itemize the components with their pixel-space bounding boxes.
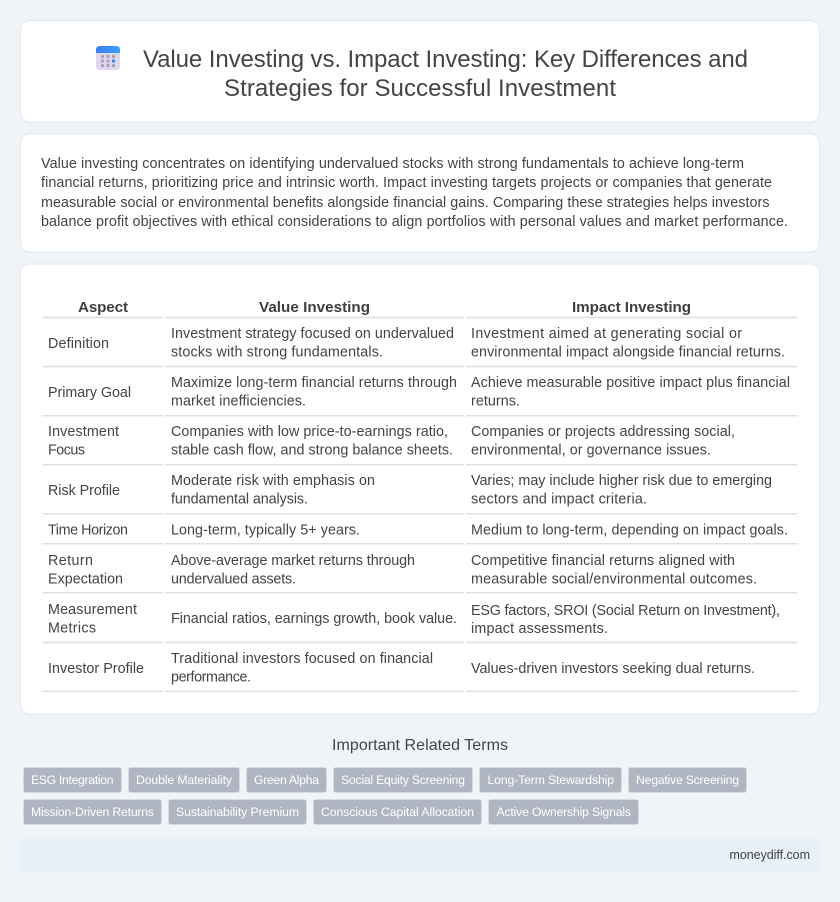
- tag: ESG Integration: ESG Integration: [31, 773, 114, 787]
- table header: Value Investing: [259, 299, 370, 316]
- row: definition: Investment strategy focused on undervalued: [171, 326, 454, 342]
- row: risk profile: sectors and impact criteria.: [471, 492, 647, 508]
- title: Strategies for Successful Investment: [224, 75, 616, 102]
- text block: introduction: measurable social or environmental benefits alongside financial gains. Comparing these strategies helps investors: [41, 195, 770, 211]
- footer: [20, 838, 820, 872]
- tag: ESG Integration: [24, 768, 122, 792]
- row: primary goal: Achieve measurable positive impact plus financial: [471, 375, 790, 391]
- row: return expectation: Expectation: [48, 572, 123, 588]
- title: [143, 46, 748, 102]
- text block: introduction: [41, 156, 788, 230]
- row: time horizon: [43, 522, 797, 544]
- row: risk profile: Risk Profile: [48, 483, 120, 499]
- text block: introduction: financial returns, prioritizing price and intrinsic worth. Impact investing targets projects or companies that generate: [41, 175, 772, 191]
- tag: Green Alpha: Green Alpha: [254, 773, 319, 787]
- row: definition: stocks with strong fundamentals.: [171, 344, 383, 360]
- row: primary goal: [43, 375, 797, 416]
- tag: Mission-Driven Returns: Mission-Driven Returns: [31, 805, 154, 819]
- panel: introduction: [20, 134, 820, 252]
- row: measurement metrics: Metrics: [48, 620, 96, 636]
- row: return expectation: Return: [48, 553, 93, 569]
- tag: Sustainability Premium: [168, 800, 306, 824]
- tag: Conscious Capital Allocation: Conscious Capital Allocation: [321, 805, 474, 819]
- row: measurement metrics: impact assessments.: [471, 621, 608, 637]
- icon: calendar: [96, 46, 120, 70]
- row: primary goal: market inefficiencies.: [171, 394, 306, 410]
- row: primary goal: Maximize long-term financial returns through: [171, 375, 457, 391]
- heading: related terms: Important Related Terms: [332, 737, 508, 754]
- row: investment focus: stable cash flow, and strong balance sheets.: [171, 442, 453, 458]
- row: primary goal: Primary Goal: [48, 385, 131, 401]
- tag: Active Ownership Signals: [488, 800, 638, 824]
- related terms tags: [24, 768, 746, 824]
- row: measurement metrics: Measurement: [48, 602, 137, 618]
- row: investment focus: Companies with low price-to-earnings ratio,: [171, 424, 448, 440]
- row: measurement metrics: [43, 602, 797, 642]
- tag: Social Equity Screening: [334, 768, 472, 792]
- row: return expectation: measurable social/environmental outcomes.: [471, 572, 757, 588]
- tag: Sustainability Premium: Sustainability Premium: [176, 805, 299, 819]
- row: investor profile: Values-driven investors seeking dual returns.: [471, 661, 755, 677]
- row: time horizon: Time Horizon: [48, 522, 128, 538]
- row: risk profile: Moderate risk with emphasis on: [171, 473, 375, 489]
- table header: [43, 299, 797, 318]
- row: risk profile: Varies; may include higher risk due to emerging: [471, 473, 772, 489]
- row: return expectation: undervalued assets.: [171, 572, 296, 588]
- row: investment focus: environmental, or governance issues.: [471, 442, 711, 458]
- tag: Double Materiality: Double Materiality: [136, 773, 233, 787]
- row: investor profile: [43, 651, 797, 691]
- table header: Impact Investing: [572, 299, 691, 316]
- panel: title card: [20, 20, 820, 122]
- tag: Double Materiality: [128, 768, 240, 792]
- row: investment focus: Investment: [48, 424, 119, 440]
- row: investor profile: Traditional investors focused on financial: [171, 651, 433, 667]
- row: time horizon: Medium to long-term, depending on impact goals.: [471, 522, 788, 538]
- row: investor profile: performance.: [171, 670, 251, 686]
- row: investor profile: Investor Profile: [48, 661, 144, 677]
- tag: Active Ownership Signals: Active Ownership Signals: [496, 805, 631, 819]
- title: Value Investing vs. Impact Investing: Key Differences and: [143, 46, 748, 73]
- tag: Green Alpha: [246, 768, 326, 792]
- row: definition: Investment aimed at generating social or: [471, 326, 742, 342]
- tag: Mission-Driven Returns: [24, 800, 162, 824]
- row: definition: [43, 326, 797, 366]
- tag: Negative Screening: [628, 768, 746, 792]
- row: return expectation: [43, 553, 797, 593]
- row: investment focus: Focus: [48, 442, 85, 458]
- panel: comparison table: [20, 264, 820, 714]
- tag: Negative Screening: Negative Screening: [636, 773, 739, 787]
- tag: Long-Term Stewardship: [480, 768, 622, 792]
- row: return expectation: Above-average market returns through: [171, 553, 415, 569]
- footer: moneydiff.com: [730, 848, 810, 862]
- row: risk profile: [43, 473, 797, 514]
- text block: introduction: balance profit objectives with ethical considerations to align portfolios with personal values and market performance.: [41, 214, 788, 230]
- row: risk profile: fundamental analysis.: [171, 492, 308, 508]
- row: measurement metrics: Financial ratios, earnings growth, book value.: [171, 611, 457, 627]
- row: definition: environmental impact alongside financial returns.: [471, 344, 785, 360]
- table header: Aspect: [78, 299, 128, 316]
- row: investment focus: Companies or projects addressing social,: [471, 424, 735, 440]
- text block: introduction: Value investing concentrates on identifying undervalued stocks with strong fundamentals to achieve long-term: [41, 156, 744, 172]
- tag: Long-Term Stewardship: Long-Term Stewardship: [488, 773, 614, 787]
- row: measurement metrics: ESG factors, SROI (Social Return on Investment),: [471, 603, 780, 619]
- tag: Social Equity Screening: Social Equity Screening: [341, 773, 465, 787]
- row: definition: Definition: [48, 336, 109, 352]
- row: primary goal: returns.: [471, 394, 520, 410]
- row: time horizon: Long-term, typically 5+ years.: [171, 522, 360, 538]
- row: return expectation: Competitive financial returns aligned with: [471, 553, 735, 569]
- tag: Conscious Capital Allocation: [314, 800, 482, 824]
- row: investment focus: [43, 424, 797, 465]
